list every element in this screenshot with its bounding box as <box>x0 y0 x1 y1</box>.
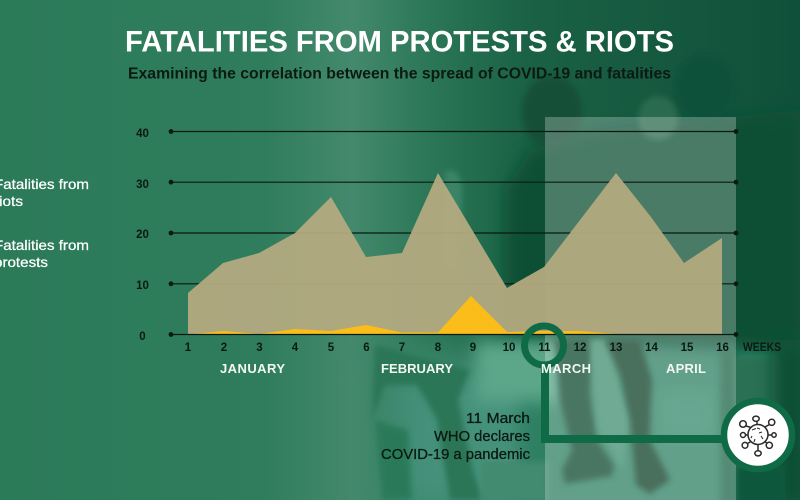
month labels: JANUARY <box>220 361 285 376</box>
month labels <box>220 361 706 376</box>
x axis week labels: 4 <box>292 342 299 354</box>
x axis week labels: 1 <box>185 342 192 354</box>
x axis week labels: 14 <box>645 342 658 354</box>
legend: fatalities from riots <box>0 176 89 209</box>
callout: WHO declares pandemic: COVID-19 a pandemic <box>381 446 530 463</box>
marker ring: week 11 <box>524 326 564 365</box>
y axis labels: 0 <box>139 331 146 343</box>
x axis week labels <box>185 342 781 354</box>
x axis week labels: 16 <box>716 342 729 354</box>
x axis week labels: 2 <box>221 342 227 354</box>
area: fatalities from protests <box>188 296 722 334</box>
title: FATALITIES FROM PROTESTS & RIOTS <box>125 26 674 58</box>
x axis week labels: 13 <box>610 342 622 354</box>
x axis week labels: 12 <box>574 342 586 354</box>
chart gridlines <box>169 130 738 286</box>
x axis week labels: 11 <box>538 342 551 354</box>
x axis week labels: 15 <box>681 342 694 354</box>
y axis labels: 30 <box>136 179 149 191</box>
x axis week labels: 6 <box>363 342 370 354</box>
callout: WHO declares pandemic: WHO declares <box>434 428 530 445</box>
callout: WHO declares pandemic: 11 March <box>466 410 530 427</box>
x axis week labels: 10 <box>503 342 515 354</box>
y axis labels: 40 <box>136 128 149 140</box>
area: fatalities from riots <box>188 173 722 334</box>
month labels: APRIL <box>666 361 706 376</box>
x axis week labels: 8 <box>435 342 442 354</box>
y axis labels <box>136 128 149 343</box>
x axis week labels: 9 <box>470 342 476 354</box>
callout: WHO declares pandemic <box>381 410 530 463</box>
baseline <box>169 333 738 336</box>
x axis week labels: 3 <box>256 342 263 354</box>
connector from week 11 to virus icon <box>545 366 730 439</box>
month labels: FEBRUARY <box>381 361 453 376</box>
y axis labels: 20 <box>136 229 149 241</box>
x axis week labels: WEEKS <box>743 342 781 354</box>
highlight panel: since pandemic <box>545 117 736 500</box>
subtitle: Examining the correlation between the spread of COVID-19 and fatalities <box>128 66 671 82</box>
x axis week labels: 7 <box>399 342 405 354</box>
y axis labels: 10 <box>136 280 149 292</box>
icon: virus badge <box>724 401 792 469</box>
x axis week labels: 5 <box>328 342 335 354</box>
legend: fatalities from protests <box>0 237 89 270</box>
month labels: MARCH <box>541 361 591 376</box>
